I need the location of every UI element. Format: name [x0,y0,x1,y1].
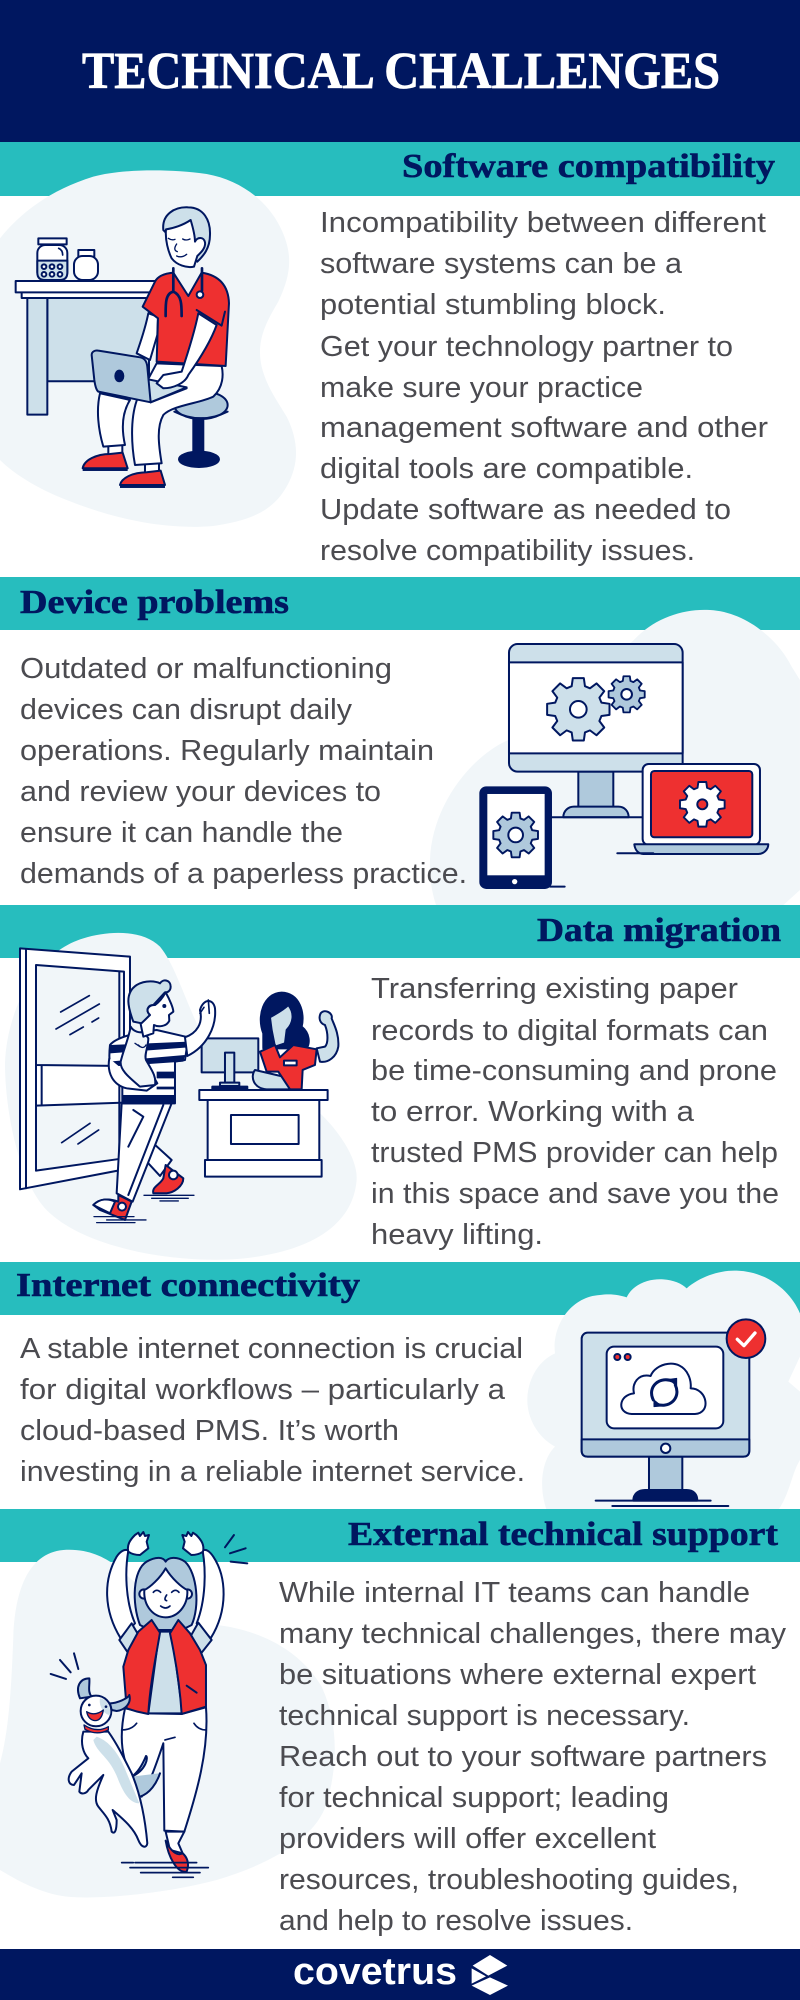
body text: and review your devices to [20,776,381,808]
body text: for digital workflows – particularly a [20,1374,506,1406]
logo wordmark: covetrus [293,1951,457,1993]
body text: ensure it can handle the [20,817,343,849]
body text: heavy lifting. [371,1219,543,1251]
background blob [5,933,357,1260]
heading: Data migration [537,912,781,949]
body text: resolve compatibility issues. [320,535,695,567]
body text [20,1333,525,1488]
body text: operations. Regularly maintain [20,735,434,767]
background blob [0,1550,335,1897]
illustration: client with cat greeting receptionist [20,948,338,1223]
body text: be time-consuming and prone [371,1055,777,1087]
body text: management software and other [320,412,768,444]
body text: software systems can be a [320,248,683,280]
body text: and help to resolve issues. [279,1905,633,1937]
body text [320,207,768,567]
heading: Software compatibility [402,148,775,185]
illustration: monitor, laptop and tablet with gears [480,644,768,888]
body text: technical support is necessary. [279,1700,690,1732]
panel: software compatibility [0,142,800,567]
body text: While internal IT teams can handle [279,1577,750,1609]
body text: records to digital formats can [371,1015,768,1047]
body text: investing in a reliable internet service. [20,1456,525,1488]
footer [0,1949,800,2000]
body text: Reach out to your software partners [279,1741,767,1773]
body text: Outdated or malfunctioning [20,653,392,685]
body text: for technical support; leading [279,1782,669,1814]
body text: providers will offer excellent [279,1823,656,1855]
body text: devices can disrupt daily [20,694,353,726]
body text [371,973,779,1251]
body text: A stable internet connection is crucial [20,1333,523,1365]
background cloud [527,1271,800,1510]
background blob [0,170,296,527]
heading: Device problems [20,584,289,621]
body text: Update software as needed to [320,494,731,526]
body text: digital tools are compatible. [320,453,693,485]
body text: resources, troubleshooting guides, [279,1864,739,1896]
body text: make sure your practice [320,372,643,404]
body text: trusted PMS provider can help [371,1137,778,1169]
title: TECHNICAL CHALLENGES [82,43,720,100]
body text: be situations where external expert [279,1659,756,1691]
illustration: monitor with cloud sync and check badge [582,1319,765,1506]
illustration: vet with laptop at desk [16,207,229,488]
body text [20,653,467,890]
background blob [430,610,800,907]
panel: internet connectivity [0,1262,800,1510]
panel: device problems [0,577,800,907]
body text: Get your technology partner to [320,331,733,363]
panel: data migration [0,905,800,1260]
heading: Internet connectivity [16,1267,360,1304]
body text: demands of a paperless practice. [20,858,467,890]
header banner [0,0,800,142]
body text: Transferring existing paper [371,973,738,1005]
logo mark [472,1955,508,1995]
body text: Incompatibility between different [320,207,766,239]
illustration: woman with jumping dog [51,1532,247,1877]
panel: external technical support [0,1509,800,1937]
body text: in this space and save you the [371,1178,779,1210]
body text: to error. Working with a [371,1096,695,1128]
body text [279,1577,787,1937]
body text: potential stumbling block. [320,289,666,321]
body text: cloud-based PMS. It’s worth [20,1415,399,1447]
heading: External technical support [348,1516,779,1553]
body text: many technical challenges, there may [279,1618,787,1650]
